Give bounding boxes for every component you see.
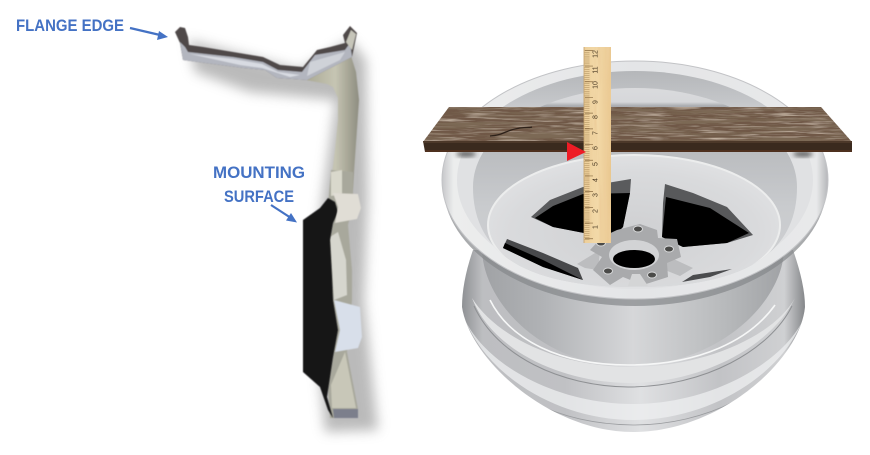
rim shadow line — [443, 62, 827, 306]
rim face — [442, 61, 828, 299]
ruler numbers: 12 — [592, 50, 600, 58]
ruler numbers: 3 — [592, 193, 600, 197]
ruler numbers: 2 — [592, 209, 600, 213]
ruler — [584, 47, 611, 243]
cut block lower — [334, 300, 362, 352]
cross-section drop shadow — [188, 40, 378, 432]
red measurement marker — [567, 142, 586, 161]
panel: wheel cross-section — [175, 26, 378, 432]
label: mounting: MOUNTING — [213, 163, 305, 182]
window upper left — [531, 179, 631, 237]
label: flange edge: FLANGE EDGE — [16, 16, 124, 35]
ruler numbers: 4 — [592, 178, 600, 182]
straightedge contact shadows — [456, 151, 813, 157]
ruler numbers: 5 — [592, 162, 600, 166]
wooden straightedge — [423, 107, 852, 152]
ruler numbers: 8 — [592, 115, 600, 119]
barrel profile with flange edges — [175, 26, 357, 80]
rim grey band — [457, 71, 813, 289]
window lower right — [682, 269, 732, 282]
lug holes — [596, 226, 674, 278]
window upper right — [662, 184, 753, 247]
wheel disc — [488, 155, 780, 295]
window lower left — [503, 239, 583, 280]
ruler numbers: 9 — [592, 100, 600, 104]
cut block upper — [333, 193, 361, 223]
arrow: mounting surface — [271, 205, 297, 222]
hub metal section — [324, 170, 358, 418]
wheel hub — [577, 224, 693, 286]
panel: wheel with straightedge and ruler — [423, 47, 852, 432]
ruler numbers: 7 — [592, 131, 600, 135]
ruler numbers: 6 — [592, 146, 600, 150]
mounting surface (black) — [303, 198, 338, 418]
wheel lower barrel — [462, 250, 805, 432]
inner barrel wall — [473, 88, 797, 287]
ruler numbers: 10 — [592, 81, 600, 89]
spoke section — [306, 56, 359, 200]
ruler numbers: 1 — [592, 225, 600, 229]
ruler numbers: 11 — [592, 66, 600, 74]
ruler numbers — [592, 50, 600, 229]
wheel inner group — [488, 155, 780, 295]
label: surface: SURFACE — [224, 187, 294, 206]
arrow: flange edge — [130, 28, 168, 40]
